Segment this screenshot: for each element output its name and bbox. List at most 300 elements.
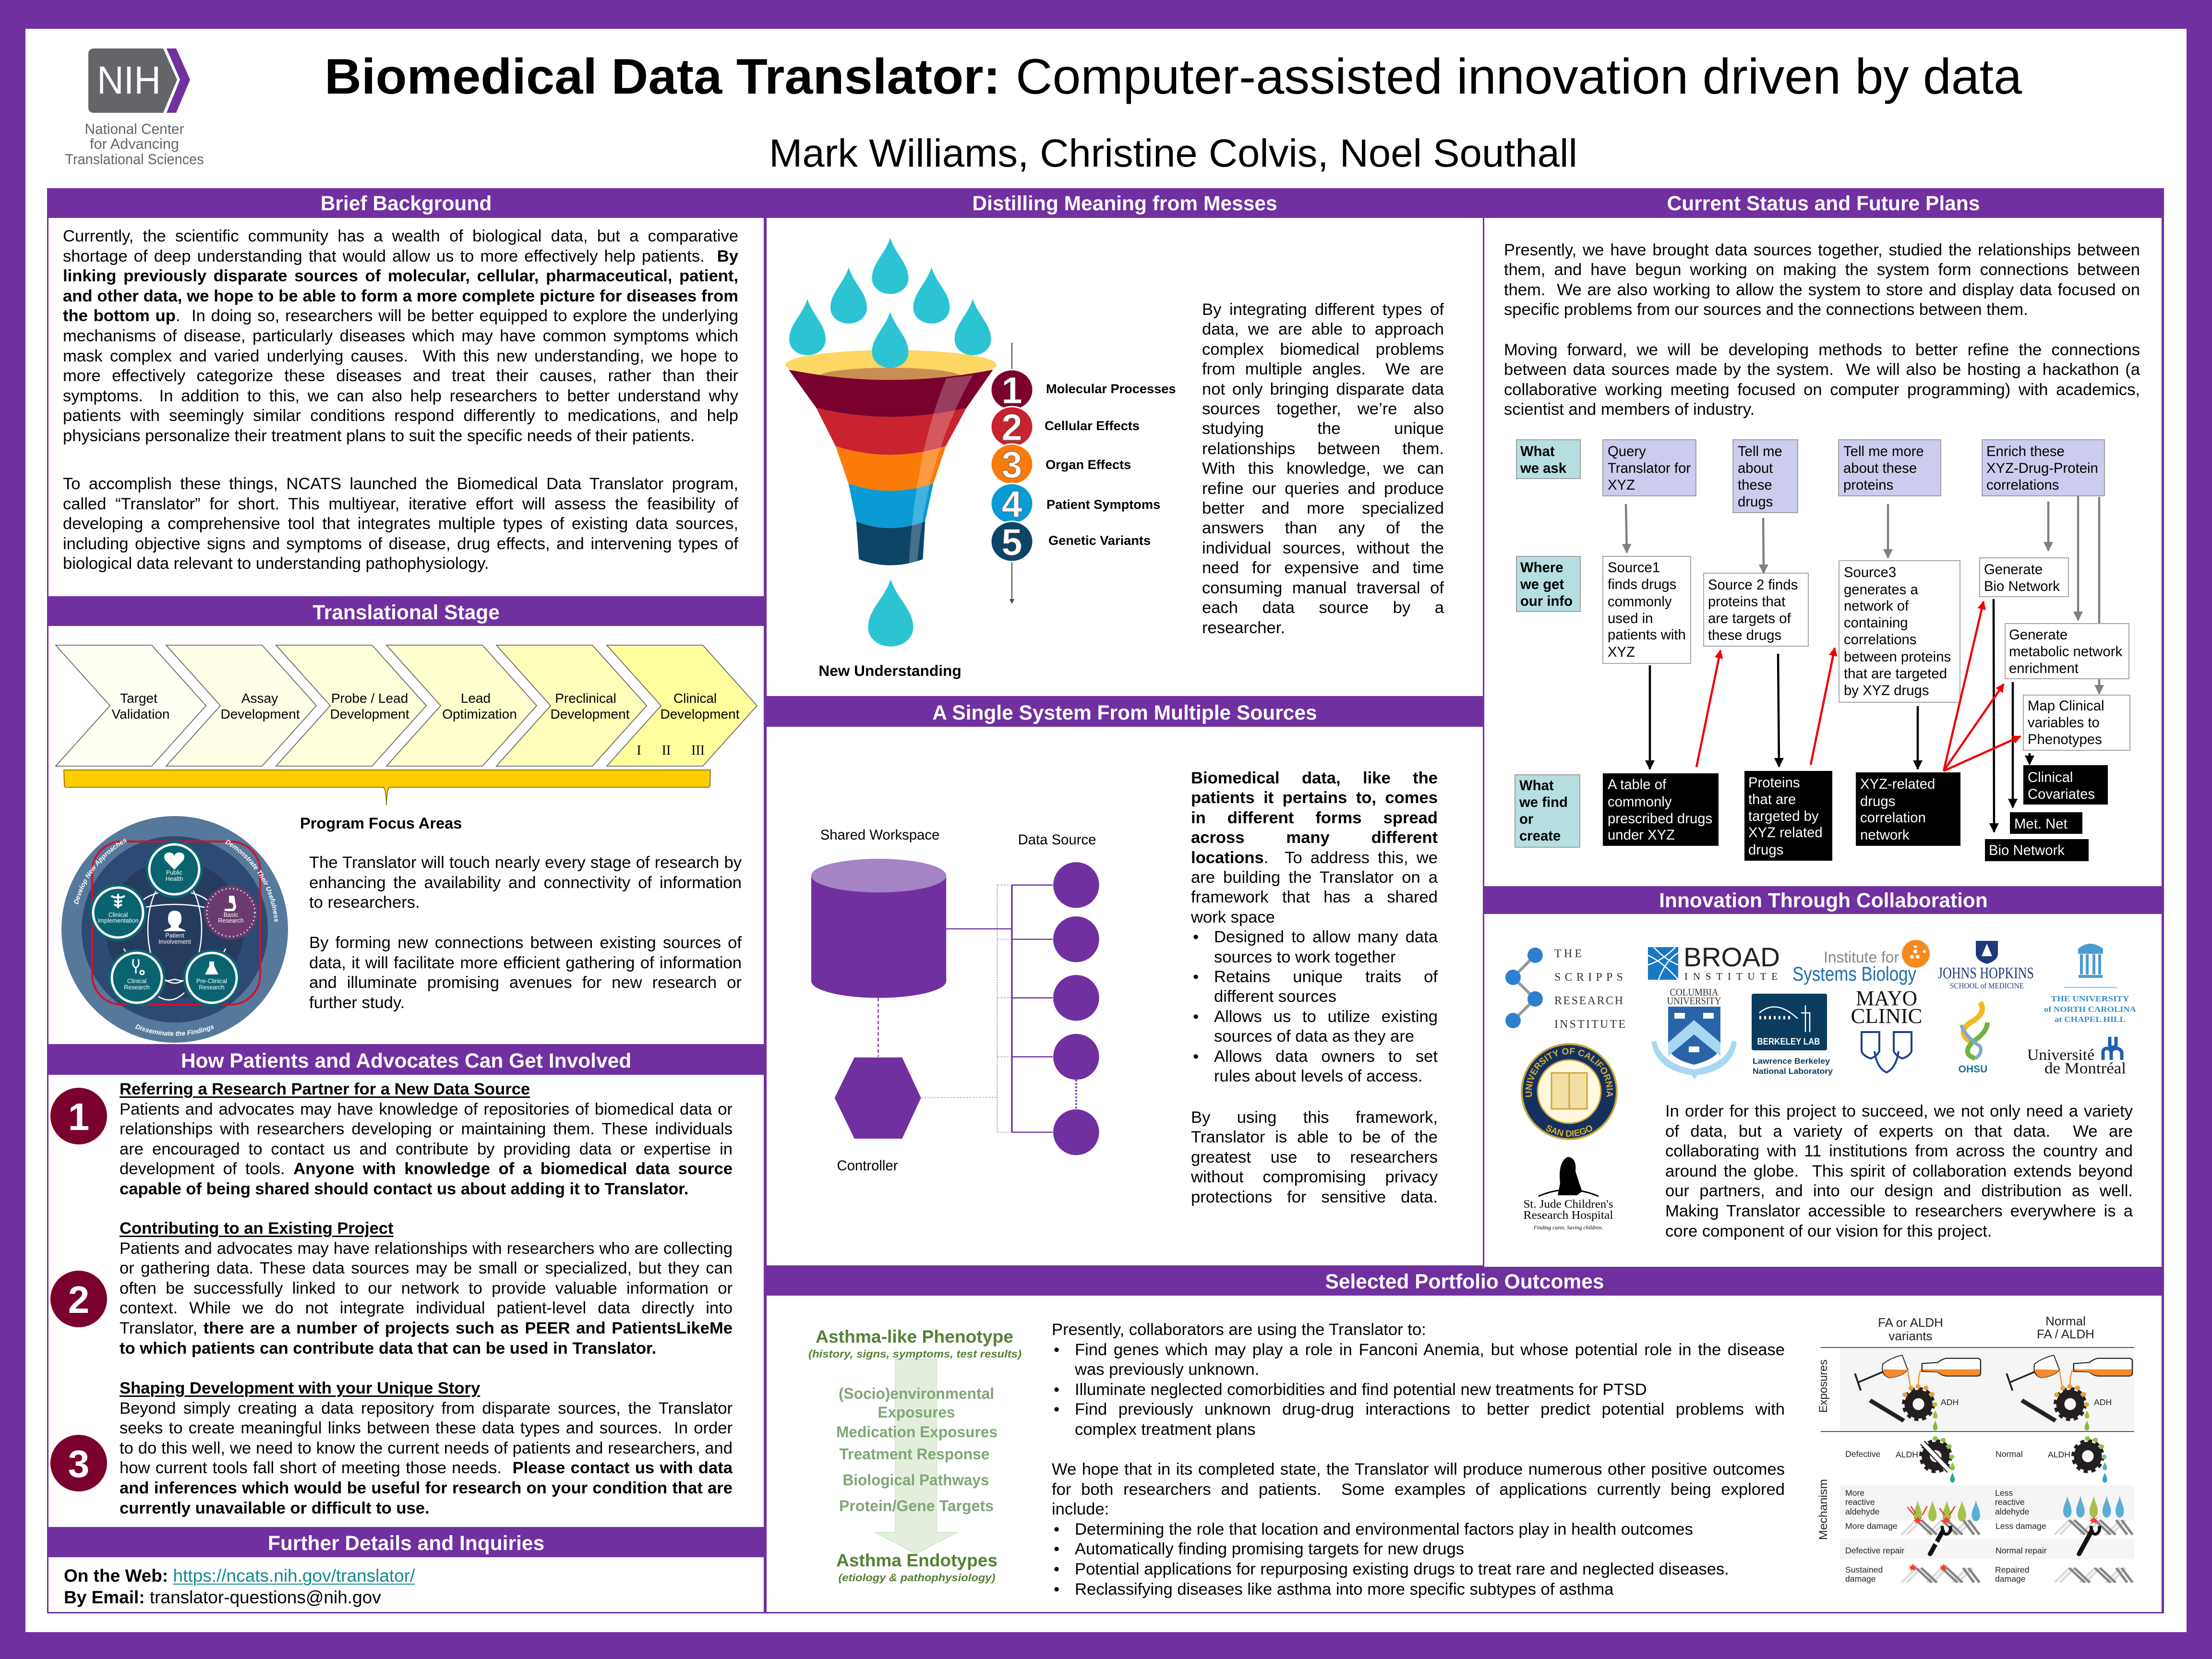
heading: current status [1483, 188, 2164, 218]
logo: ohsu: OHSU [1959, 1064, 1987, 1075]
text: shaping development: seeks to create meaningful links between these data types and sources. In order [120, 1419, 733, 1437]
text: current status: Presently, we have brought data sources together, studied the relationships between [1504, 241, 2140, 259]
text: integrating data: each data source by a [1202, 599, 1444, 617]
slash edges [1921, 1441, 1951, 1472]
text: future plans: between data sources made by the system. We will also be hosting a hackathon (a [1504, 361, 2140, 379]
text: collaboration: Making Translator accessible to researchers everywhere is a [1665, 1202, 2133, 1220]
logo: berkeley lab: Lawrence Berkeley [1753, 1057, 1830, 1066]
asthma endotypes diagram: (etiology & pathophysiology) [838, 1572, 996, 1584]
result boxes: Covariates [2028, 786, 2095, 802]
text: background paragraph 1: mask complex and varied underlying causes. With this new understanding, we hope to [63, 347, 738, 365]
text: forming new connections: further study. [309, 994, 405, 1012]
focus areas circular diagram: Clinical [108, 912, 128, 918]
down arrow [875, 1359, 957, 1554]
figure labels: ADH [2094, 1397, 2112, 1407]
text: how collaborators use translator: Find previously unknown drug-drug interactions to better predict potential problems with [1075, 1400, 1785, 1419]
text: contributing to an existing project: often be successfully linked to our network to provide valuable information or [120, 1279, 733, 1298]
logo: unc chapel hill [2044, 945, 2137, 1024]
query boxes: XYZ-Drug-Protein [1986, 460, 2098, 476]
partner institution logos [1483, 886, 2164, 1267]
text: collaboration: our partners, and into our design and distribution as well. [1665, 1182, 2133, 1200]
diagram: translational stages and focus areas [55, 645, 757, 1043]
source boxes: Source3 [1844, 565, 1896, 580]
source boxes: between proteins [1844, 649, 1951, 665]
numbered badges: 2 [68, 1278, 89, 1321]
heading: how patients can get involved: How Patients and Advocates Can Get Involved [181, 1050, 631, 1072]
text: background paragraph 2 [63, 475, 738, 573]
architecture labels: Data Source [1018, 832, 1096, 848]
text: forming new connections: and illuminate promising avenues for new research or [309, 974, 742, 992]
numbered scale with arrow: 3 [1001, 444, 1022, 486]
numbered scale with arrow: 1 [1001, 369, 1022, 411]
NIH NCATS logo: National Center [84, 120, 184, 137]
query boxes [1603, 440, 2104, 513]
text: privacy framework: By using this framework, [1191, 1108, 1438, 1127]
text: privacy framework: Translator is able to be of the [1191, 1128, 1438, 1146]
figure labels: ADH [1941, 1397, 1959, 1407]
panel: selected portfolio outcomes [765, 1267, 2164, 1613]
query boxes: Tell me [1738, 444, 1782, 459]
figure labels: ALDH [2048, 1450, 2070, 1459]
text: biomedical data list: in different forms spread [1191, 809, 1438, 827]
logo: mayo clinic: MAYO [1856, 986, 1917, 1010]
query boxes: correlations [1986, 477, 2059, 493]
text: biomedical data list: Designed to allow many data [1214, 928, 1438, 946]
damage stars [1907, 1506, 2098, 1571]
panel: current status and future plans [1483, 188, 2164, 886]
focus areas circular diagram [61, 816, 288, 1043]
figure labels: variants [1888, 1329, 1933, 1343]
text: contributing to an existing project: Translator, there are a number of projects such as PEER and PatientsLikeMe [120, 1319, 733, 1337]
source boxes: network of [1844, 598, 1909, 614]
logo: berkeley lab [1752, 994, 1833, 1076]
text: shaping development: and inferences which would be useful for research on your condition that are [120, 1479, 733, 1497]
connector lines [878, 885, 1076, 1132]
text: biomedical data list: locations. To address this, we [1191, 849, 1438, 867]
text: background paragraph 2: including objective signs and symptoms of disease, drug effects, and intervening types of [63, 535, 738, 553]
logo: scripps: INSTITUTE [1554, 1018, 1625, 1031]
text: background paragraph 1: shortage of deep understanding that would allow us to more effectively help patients. By [63, 247, 738, 265]
logo: berkeley lab: BERKELEY LAB [1757, 1037, 1820, 1047]
intermediate data layers [836, 1385, 998, 1515]
figure labels: Less damage [1996, 1521, 2046, 1531]
numbered scale with arrow [991, 343, 1033, 604]
source boxes: XYZ [1608, 644, 1635, 660]
heading: distilling meaning: Distilling Meaning from Messes [972, 192, 1277, 215]
result boxes: under XYZ [1608, 827, 1675, 843]
figure labels: FA or ALDH [1878, 1315, 1943, 1330]
text: future outcomes: Determining the role that location and environmental factors play in health outcomes [1075, 1520, 1693, 1539]
heading: further details [47, 1528, 765, 1557]
black result arrows [1650, 599, 2030, 832]
heading: distilling meaning [765, 188, 1484, 218]
text: shaping development: currently unavailable or difficult to use. [120, 1499, 430, 1517]
focus areas circular diagram: Health [166, 876, 183, 882]
funnel labels: Molecular Processes [1046, 381, 1176, 396]
text: background paragraph 1: more effectively categorize these diseases and treat their causes, rather than their [63, 367, 738, 385]
figure labels: More damage [1845, 1521, 1898, 1531]
new understanding drop [868, 579, 913, 647]
heading: current status: Current Status and Future Plans [1667, 192, 1980, 215]
result boxes: XYZ-related [1860, 776, 1935, 792]
asthma endotypes diagram [765, 1267, 2164, 1613]
result boxes [1603, 765, 2108, 861]
heading: innovation through collaboration [1483, 886, 2164, 914]
query boxes: Translator for [1608, 460, 1691, 476]
result boxes: prescribed drugs [1608, 811, 1712, 827]
logo: johns hopkins: JOHNS HOPKINS [1938, 964, 2034, 982]
text: contributing to an existing project: Patients and advocates may have relationships with researchers who are collecting [120, 1239, 733, 1258]
stage chevrons: Assay [241, 691, 278, 706]
text: referring a research partner: development of tools. Anyone with knowledge of a biomedical data source [120, 1160, 733, 1178]
text: biomedical data list: Biomedical data, like the [1191, 769, 1438, 787]
logo: universite de montreal [2027, 1037, 2126, 1077]
logo: unc chapel hill: at CHAPEL HILL [2055, 1015, 2126, 1024]
text: future plans: scientist and members of industry. [1504, 400, 1755, 419]
yellow bracket [64, 770, 710, 805]
text: referring a research partner [120, 1080, 733, 1198]
stage chevrons [56, 645, 757, 766]
source boxes: by XYZ drugs [1844, 683, 1929, 698]
query boxes: Query [1608, 444, 1646, 459]
logo: uc san diego seal: SAN DIEGO [1546, 1125, 1592, 1137]
figure labels: Exposures [1817, 1359, 1830, 1413]
text: current status: specific problems from our sources and the connections between them. [1504, 301, 2028, 319]
figure labels: aldehyde [1995, 1507, 2029, 1516]
text: integrating data: from multiple angles. We are [1202, 360, 1444, 378]
controller hexagon [835, 1058, 921, 1139]
numbered scale with arrow: 2 [1001, 406, 1022, 448]
text: future outcomes: We hope that in its completed state, the Translator will produce numerous other positive outcomes [1052, 1460, 1785, 1479]
text: shaping development: Beyond simply creating a data repository from disparate sources, the Translator [120, 1399, 733, 1418]
text: biomedical data list: Allows us to utilize existing [1214, 1008, 1438, 1026]
result boxes: that are [1748, 792, 1796, 807]
heading: single system [765, 697, 1484, 727]
funnel labels: New Understanding [818, 662, 962, 679]
gear normal [2073, 1441, 2103, 1471]
source boxes: Generate [1984, 562, 2043, 577]
NIH NCATS logo: for Advancing [90, 135, 179, 152]
logo: st jude: Research Hospital [1524, 1209, 1613, 1222]
endotypes heading: Asthma Endotypes [836, 1551, 998, 1570]
result boxes: Clinical [2028, 769, 2073, 785]
funnel labels: Organ Effects [1046, 457, 1131, 472]
stage chevrons: I [637, 743, 641, 758]
panel: further details and inquiries [47, 1528, 765, 1613]
text: how collaborators use translator: Find genes which may play a role in Fanconi Anemia, but whose potential role in the disease [1075, 1341, 1785, 1359]
focus areas circular diagram: Implementation [97, 917, 139, 924]
flowchart: ask, source, create [1483, 188, 2164, 886]
phenotype heading: Asthma-like Phenotype [816, 1327, 1013, 1346]
icon: patient [164, 911, 185, 931]
logo: scripps [1505, 948, 1625, 1031]
title: Computer-assisted innovation driven by data [1016, 49, 2022, 105]
result boxes: Bio Network [1989, 842, 2065, 858]
program focus areas label: Program Focus Areas [300, 814, 462, 832]
panel: distilling meaning from messes [765, 188, 1484, 697]
numbered badges: 3 [68, 1443, 89, 1485]
exposures left [1855, 1355, 1981, 1431]
text: how collaborators use translator: complex treatment plans [1075, 1420, 1256, 1439]
source boxes: these drugs [1708, 627, 1781, 643]
text: collaboration [1665, 1102, 2133, 1241]
text: integrating data: not only bringing disparate data [1202, 380, 1444, 398]
stage chevrons: Development [551, 707, 630, 721]
logo: columbia university: COLUMBIA [1670, 986, 1719, 998]
icon: stethoscope [133, 959, 144, 974]
fanconi anemia mechanism figure [1817, 1314, 2134, 1584]
text: background paragraph 1: mechanisms of disease, particularly diseases which may have common symptoms which [63, 327, 738, 345]
result boxes: targeted by [1748, 808, 1819, 824]
text: current status: them. We are also working to allow the system to store and display data focused on [1504, 281, 2140, 299]
query boxes: XYZ [1608, 477, 1635, 493]
text: future plans: collaborative working meeting focused on computer programming) with academics, [1504, 381, 2140, 399]
panel: brief background [47, 188, 765, 598]
intermediate data layers: Treatment Response [839, 1445, 990, 1463]
logo: johns hopkins [1938, 941, 2034, 990]
row label boxes: we ask [1520, 460, 1567, 476]
NIH NCATS logo [65, 48, 204, 168]
icon: flask [205, 962, 218, 974]
heading: selected portfolio outcomes: Selected Portfolio Outcomes [1325, 1271, 1604, 1293]
heading: further details: Further Details and Inquiries [268, 1532, 544, 1555]
icon: microscope [225, 896, 236, 911]
logo: st jude: St. Jude Children's [1524, 1198, 1613, 1211]
numbered scale with arrow: 5 [1001, 521, 1022, 563]
wrench defective [1930, 1526, 1950, 1554]
stage chevrons: Clinical [673, 691, 717, 706]
text: background paragraph 1: symptoms. In addition to this, we can also help researchers to better understand why [63, 387, 738, 405]
heading: brief background [47, 188, 765, 218]
figure labels: aldehyde [1845, 1507, 1879, 1516]
intermediate data layers: Exposures [878, 1404, 955, 1421]
row label boxes: What [1520, 444, 1555, 459]
source boxes: used in [1608, 611, 1653, 626]
source boxes: Phenotypes [2028, 732, 2102, 747]
text: translator touches every stage [309, 854, 742, 912]
text: shaping development: Shaping Development with your Unique Story [120, 1379, 480, 1397]
figure labels [1817, 1314, 2112, 1584]
figure labels: Defective repair [1845, 1546, 1904, 1555]
text: integrating data: relationships between them. [1202, 440, 1444, 458]
text: privacy framework: without compromising privacy [1191, 1168, 1438, 1186]
funnel [785, 350, 997, 565]
text: integrating data [1202, 300, 1444, 638]
result boxes: Met. Net [2014, 816, 2068, 832]
logo: institute for systems biology: Institute for [1824, 949, 1899, 966]
dna strands sustained [1901, 1568, 1980, 1583]
result boxes: drugs [1860, 793, 1895, 809]
figure labels: More [1845, 1488, 1864, 1498]
text: biomedical data list: different sources [1214, 987, 1336, 1006]
row label boxes: create [1519, 828, 1561, 844]
figure labels: Defective [1845, 1449, 1880, 1459]
text: contributing to an existing project: context. While we do not integrate individual patient-level data directly into [120, 1299, 733, 1317]
logo: columbia university: UNIVERSITY [1667, 995, 1721, 1007]
logo: st jude: Finding cures. Saving children. [1533, 1225, 1603, 1231]
row label boxes: Where [1520, 560, 1563, 576]
text: biomedical data list: sources of data as they are [1214, 1027, 1414, 1046]
logo: mayo clinic [1851, 986, 1922, 1072]
data source circles [1053, 862, 1099, 1155]
text: background paragraph 2: To accomplish these things, NCATS launched the Biomedical Data Translator program, [63, 475, 738, 493]
architecture labels [820, 827, 1096, 1174]
row label boxes: What [1519, 778, 1554, 793]
text: forming new connections [309, 934, 742, 1012]
logo: unc chapel hill: THE UNIVERSITY [2051, 994, 2129, 1003]
focus areas circular diagram: Pre-Clinical [196, 978, 227, 985]
panel: innovation through collaboration [1483, 886, 2164, 1267]
text: collaboration: In order for this project to succeed, we not only need a variety [1665, 1102, 2133, 1120]
figure labels: Sustained [1845, 1565, 1883, 1575]
NIH NCATS logo: NIH [97, 59, 161, 102]
figure labels: ALDH [1896, 1450, 1918, 1459]
row label boxes: we find [1519, 794, 1568, 810]
text: biomedical data list: rules about levels of access. [1214, 1067, 1422, 1085]
source boxes: that are targeted [1844, 666, 1947, 682]
logo: universite de montreal: de Montréal [2044, 1060, 2126, 1077]
text: forming new connections: By forming new connections between existing sources of [309, 934, 742, 952]
text: biomedical data list: framework that has a shared [1191, 888, 1438, 906]
stage chevrons: Validation [112, 707, 169, 721]
text: integrating data: complex biomedical problems [1202, 340, 1444, 359]
stage chevrons: III [691, 743, 705, 758]
result boxes: drugs [1748, 842, 1783, 858]
source boxes: containing [1844, 615, 1908, 631]
text: background paragraph 1: the bottom up. In doing so, researchers will be better equipped to explore the underlying [63, 307, 738, 325]
logo: broad institute: BROAD [1683, 942, 1780, 972]
text: forming new connections: data, it will facilitate more efficient gathering of information [309, 954, 742, 972]
figure labels: reactive [1845, 1497, 1875, 1507]
text: background paragraph 1: and other data, we hope to be able to form a more complete picture for diseases from [63, 287, 738, 305]
text: how collaborators use translator [1052, 1320, 1785, 1440]
intermediate data layers: Protein/Gene Targets [839, 1497, 994, 1515]
funnel labels: Patient Symptoms [1046, 497, 1160, 512]
heading: innovation through collaboration: Innovation Through Collaboration [1659, 890, 1988, 912]
text: background paragraph 2: called “Translator” for short. This multiyear, iterative effort will assess the feasibility of [63, 495, 738, 513]
text: integrating data: answers than any of the [1202, 519, 1444, 537]
stage chevrons: Target [120, 691, 157, 706]
text: biomedical data list: are building the Translator on a [1191, 868, 1438, 887]
query boxes: about these [1843, 460, 1917, 476]
logo: uc san diego seal [1522, 1044, 1617, 1139]
logo: institute for systems biology: Systems Biology [1792, 962, 1916, 985]
numbered scale with arrow: 4 [1001, 483, 1022, 525]
source boxes: Generate [2009, 627, 2068, 643]
focus areas circular diagram: Basic [224, 912, 238, 918]
result boxes: correlation [1860, 810, 1926, 826]
text: contributing to an existing project: or gathering data. These data sources may be small or specialized, but they can [120, 1259, 733, 1277]
intermediate data layers: Biological Pathways [843, 1471, 989, 1489]
stage chevrons: Development [221, 707, 300, 721]
source boxes: metabolic network [2009, 644, 2122, 660]
text: translator touches every stage: enhancing the availability and connectivity of information [309, 874, 742, 892]
source boxes: are targets of [1708, 611, 1791, 626]
defective slash [1923, 1443, 1949, 1471]
text: future outcomes: for both researchers and patients. Some examples of applications currently being explored [1052, 1480, 1785, 1499]
row label boxes: we get [1520, 577, 1564, 592]
text: privacy framework: greatest use to researchers [1191, 1148, 1438, 1166]
text: future outcomes: Automatically finding promising targets for new drugs [1075, 1540, 1464, 1558]
text: how collaborators use translator: Presently, collaborators are using the Translator to: [1052, 1321, 1426, 1339]
logo: scripps: THE [1554, 948, 1582, 960]
text: referring a research partner: Referring a Research Partner for a New Data Source [120, 1080, 530, 1098]
source boxes: finds drugs [1608, 577, 1676, 592]
text: future outcomes: Reclassifying diseases like asthma into more specific subtypes of asthma [1075, 1580, 1613, 1599]
front drop [872, 312, 908, 368]
text: background paragraph 1: physicians personalize their treatment plans to suit the specific needs of their patients. [63, 427, 695, 445]
source boxes: generates a [1844, 582, 1918, 598]
text: integrating data: sources together, we’re also [1202, 400, 1444, 418]
logo: mayo clinic: CLINIC [1851, 1004, 1922, 1028]
text: background paragraph 1: patients with seemingly similar conditions respond differently to medications, and help [63, 407, 738, 425]
text: integrating data: consuming manual traversal of [1202, 579, 1444, 597]
figure labels: Mechanism [1817, 1479, 1830, 1540]
text: future outcomes: include: [1052, 1500, 1109, 1518]
logo: institute for systems biology [1792, 940, 1930, 985]
heading: brief background: Brief Background [321, 192, 492, 215]
title: Biomedical Data Translator: [325, 49, 1000, 105]
exposures right [2007, 1355, 2132, 1431]
result boxes: commonly [1608, 794, 1672, 810]
stage chevrons: Development [330, 707, 409, 721]
red feedback arrows [1696, 601, 2020, 771]
focus areas circular diagram: Involvement [158, 938, 191, 945]
text: shaping development [120, 1379, 733, 1517]
text: translator touches every stage: The Translator will touch nearly every stage of research by [309, 854, 742, 872]
panel: single system from multiple sources [765, 697, 1484, 1267]
poster header [65, 48, 2022, 175]
query boxes: drugs [1738, 494, 1773, 510]
logo: scripps: SCRIPPS [1554, 971, 1623, 984]
row label boxes: our info [1520, 593, 1573, 609]
focus areas circular diagram: Public [166, 869, 182, 876]
text: collaboration: around the globe. This spirit of collaboration extends beyond [1665, 1162, 2133, 1180]
text: contact details [64, 1566, 415, 1607]
system architecture diagram [765, 697, 1484, 1267]
heading: translational stage: Translational Stage [313, 601, 500, 624]
stage chevrons: Preclinical [555, 691, 616, 706]
wrench normal [2079, 1526, 2100, 1554]
gray query arrows [1626, 496, 2099, 694]
source boxes: proteins that [1708, 594, 1785, 610]
figure labels: reactive [1995, 1497, 2025, 1507]
icon: caduceus [111, 894, 125, 908]
gear defective [1921, 1441, 1950, 1471]
funnel labels [818, 381, 1176, 679]
intermediate data layers: Medication Exposures [836, 1423, 998, 1441]
text: future plans [1504, 340, 2140, 420]
focus areas circular diagram: Research [124, 984, 150, 991]
numbered badges: 1 [68, 1095, 89, 1138]
text: biomedical data list [1191, 769, 1438, 1087]
asthma endotypes diagram: (history, signs, symptoms, test results) [808, 1348, 1022, 1360]
text: privacy framework [1191, 1108, 1438, 1207]
source boxes: Map Clinical [2028, 698, 2104, 714]
text: background paragraph 1 [63, 227, 738, 445]
focus areas circular diagram: Disseminate the Findings [135, 1024, 214, 1036]
text: current status: them, and have begun working on making the system form connections between [1504, 261, 2140, 279]
text: background paragraph 1: Currently, the scientific community has a wealth of biological data, but a comparative [63, 227, 738, 245]
figure labels: Normal [1996, 1449, 2023, 1459]
result boxes: XYZ related [1748, 825, 1823, 841]
text: collaboration: collaborating with 11 institutions from across the country and [1665, 1142, 2133, 1160]
source boxes: Bio Network [1984, 578, 2060, 594]
row label boxes [1515, 440, 1580, 847]
defective metabolite drops [1933, 1436, 1955, 1483]
heading: translational stage [47, 598, 765, 626]
logo: columbia university [1651, 986, 1737, 1079]
